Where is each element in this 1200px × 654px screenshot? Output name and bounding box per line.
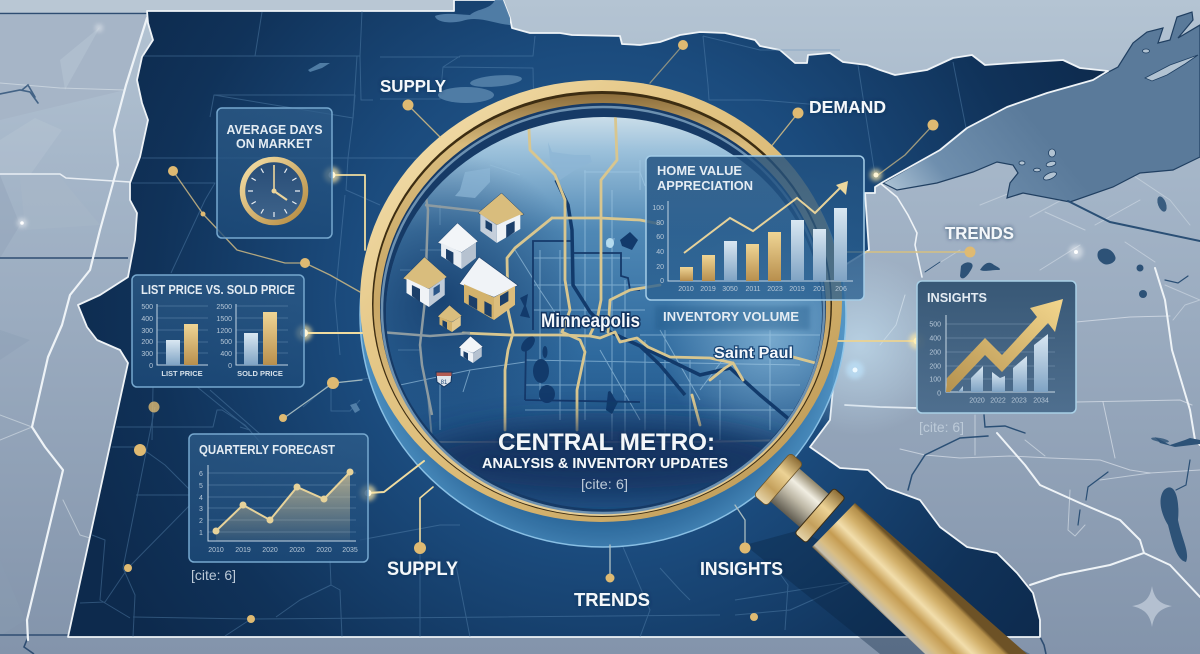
heading line one: HOME VALUE: [657, 164, 742, 178]
panel: average days on market: [217, 108, 332, 238]
area line chart: 3: [199, 506, 203, 513]
icon: sparkle watermark: [1132, 586, 1172, 627]
muted roads: [380, 185, 790, 442]
heading: INSIGHTS: [927, 291, 987, 305]
label: trends bottom: TRENDS: [574, 590, 650, 610]
area line chart: 1: [199, 530, 203, 537]
label: inventory volume: INVENTORY VOLUME: [663, 310, 799, 324]
area line chart: 5: [199, 483, 203, 490]
state internal county lines: [80, 11, 966, 637]
bar and line chart: 2019: [700, 286, 716, 293]
city label: Minneapolis: Minneapolis: [541, 311, 640, 332]
chart with rising arrow: 2022: [990, 398, 1006, 404]
bar chart: sold price: SOLD PRICE: [237, 369, 283, 378]
area line chart: 2: [199, 518, 203, 525]
bar chart: list price: 500: [141, 304, 153, 311]
city label: Saint Paul: Saint Paul: [714, 345, 793, 362]
street grid: [398, 160, 820, 440]
bar and line chart: 40: [656, 249, 664, 256]
gold roof house top: [478, 193, 524, 243]
handle neck and collars: [752, 451, 845, 543]
panel: home value appreciation: [646, 156, 864, 300]
small gold house: [438, 305, 462, 332]
chart with rising arrow: 0: [937, 390, 941, 398]
magnifying glass handle: [752, 451, 1027, 654]
bar chart: list price: 300: [141, 351, 153, 358]
bar and line chart: 206: [835, 286, 847, 293]
title main line: CENTRAL METRO:: [498, 429, 715, 456]
interstate shield: [436, 372, 452, 387]
city boundary: [525, 241, 640, 402]
chart with rising arrow: 2020: [969, 398, 985, 404]
chart with rising arrow: 100: [929, 376, 941, 384]
bar and line chart: 80: [656, 220, 664, 227]
heading: average days: AVERAGE DAYS: [226, 123, 322, 137]
citation: forecast: [cite: 6]: [191, 567, 236, 583]
white house: [438, 223, 478, 269]
pale water patches: [455, 142, 615, 248]
handle shadow: [745, 530, 1030, 654]
bar chart: list price: 400: [141, 316, 153, 323]
area line chart: 2020: [289, 547, 305, 554]
area line chart: [199, 465, 358, 554]
isle royale and apostle islands: [1019, 49, 1198, 182]
glowing nodes: [17, 24, 1083, 501]
panel: insights: [917, 281, 1076, 413]
chart with rising arrow: 2034: [1033, 398, 1049, 404]
label: demand: DEMAND: [809, 97, 886, 117]
bar chart: list price: 300: [141, 328, 153, 335]
bar chart: sold price: 2500: [216, 304, 232, 311]
glass base: [380, 110, 830, 515]
title: [482, 429, 728, 492]
icon: clock: [242, 160, 306, 222]
rivers: [556, 180, 790, 420]
area line chart: 4: [199, 495, 203, 502]
chart with rising arrow: 200: [929, 350, 941, 356]
small lakes and rivers on right: [960, 195, 1200, 562]
label: supply bottom: SUPPLY: [387, 559, 458, 580]
citation: insights: [cite: 6]: [919, 419, 964, 435]
lakes in lens: [518, 232, 638, 414]
heading line two: APPRECIATION: [657, 179, 753, 193]
panel: quarterly forecast: [189, 434, 368, 562]
bar and line chart: 60: [656, 234, 664, 241]
label: supply top: SUPPLY: [380, 76, 446, 96]
chart with rising arrow: 2023: [1011, 398, 1027, 404]
area line chart: 2020: [262, 547, 278, 554]
chart with rising arrow: 500: [929, 322, 941, 328]
northern lakes: [308, 0, 522, 103]
bar and line chart: 20: [656, 264, 664, 271]
area line chart: 2020: [316, 547, 332, 554]
magnifier ring: [360, 80, 842, 522]
title backdrop: [416, 422, 796, 498]
bar and line chart: 100: [652, 205, 664, 212]
gold roads: [463, 105, 830, 430]
bar chart: sold price: 500: [220, 339, 232, 346]
bar chart: sold price: 400: [220, 351, 232, 358]
bar and line chart: 201: [813, 286, 825, 293]
bar and line chart: 2023: [767, 286, 783, 293]
pale glow east of lens: [770, 255, 950, 435]
bar chart: list price: 200: [141, 339, 153, 346]
bar and line chart: 2019: [789, 286, 805, 293]
heading: on market: ON MARKET: [236, 137, 312, 151]
title citation: [cite: 6]: [581, 476, 628, 492]
area line chart: 2035: [342, 547, 358, 554]
bar chart: sold price: 1200: [216, 328, 232, 335]
label: inventory volume: [655, 306, 810, 330]
connector lines and nodes: [173, 45, 970, 578]
bar chart: sold price: 1500: [216, 316, 232, 323]
interstate shield: 81: [441, 380, 448, 386]
lake superior: [883, 12, 1200, 202]
large white roof gold house: [459, 257, 518, 320]
title subtitle: ANALYSIS & INVENTORY UPDATES: [482, 455, 728, 472]
chart with rising arrow: 200: [929, 364, 941, 370]
label: trends right: TRENDS: [945, 223, 1014, 243]
gold roof house left: [403, 257, 447, 307]
bar chart: sold price: 0: [228, 363, 232, 370]
area line chart: 6: [199, 471, 203, 478]
lens outer glow band: [360, 83, 846, 547]
bar and line chart: 2010: [678, 286, 694, 293]
heading: LIST PRICE VS. SOLD PRICE: [141, 283, 295, 297]
bar chart: list price: LIST PRICE: [161, 369, 203, 378]
chart with rising arrow: 400: [929, 336, 941, 342]
area line chart: 2010: [208, 547, 224, 554]
bar chart: sold price: [216, 304, 288, 378]
area line chart: 2019: [235, 547, 251, 554]
bar and line chart: 3050: [722, 286, 738, 293]
bar and line chart: 2011: [745, 286, 761, 293]
lower left lake: [350, 403, 360, 413]
node dots: [124, 40, 976, 623]
chart with rising arrow: [929, 299, 1063, 404]
handle shaft: [812, 503, 1027, 654]
small white house: [458, 336, 483, 363]
panel: list price vs sold price: [132, 275, 304, 387]
label: insights bottom: INSIGHTS: [700, 559, 783, 579]
lens map content: [380, 105, 840, 515]
bar chart: list price: 0: [149, 363, 153, 370]
bar and line chart: [652, 181, 853, 293]
bar chart: list price: [141, 304, 208, 378]
bar and line chart: 0: [660, 278, 664, 285]
heading: QUARTERLY FORECAST: [199, 443, 335, 457]
